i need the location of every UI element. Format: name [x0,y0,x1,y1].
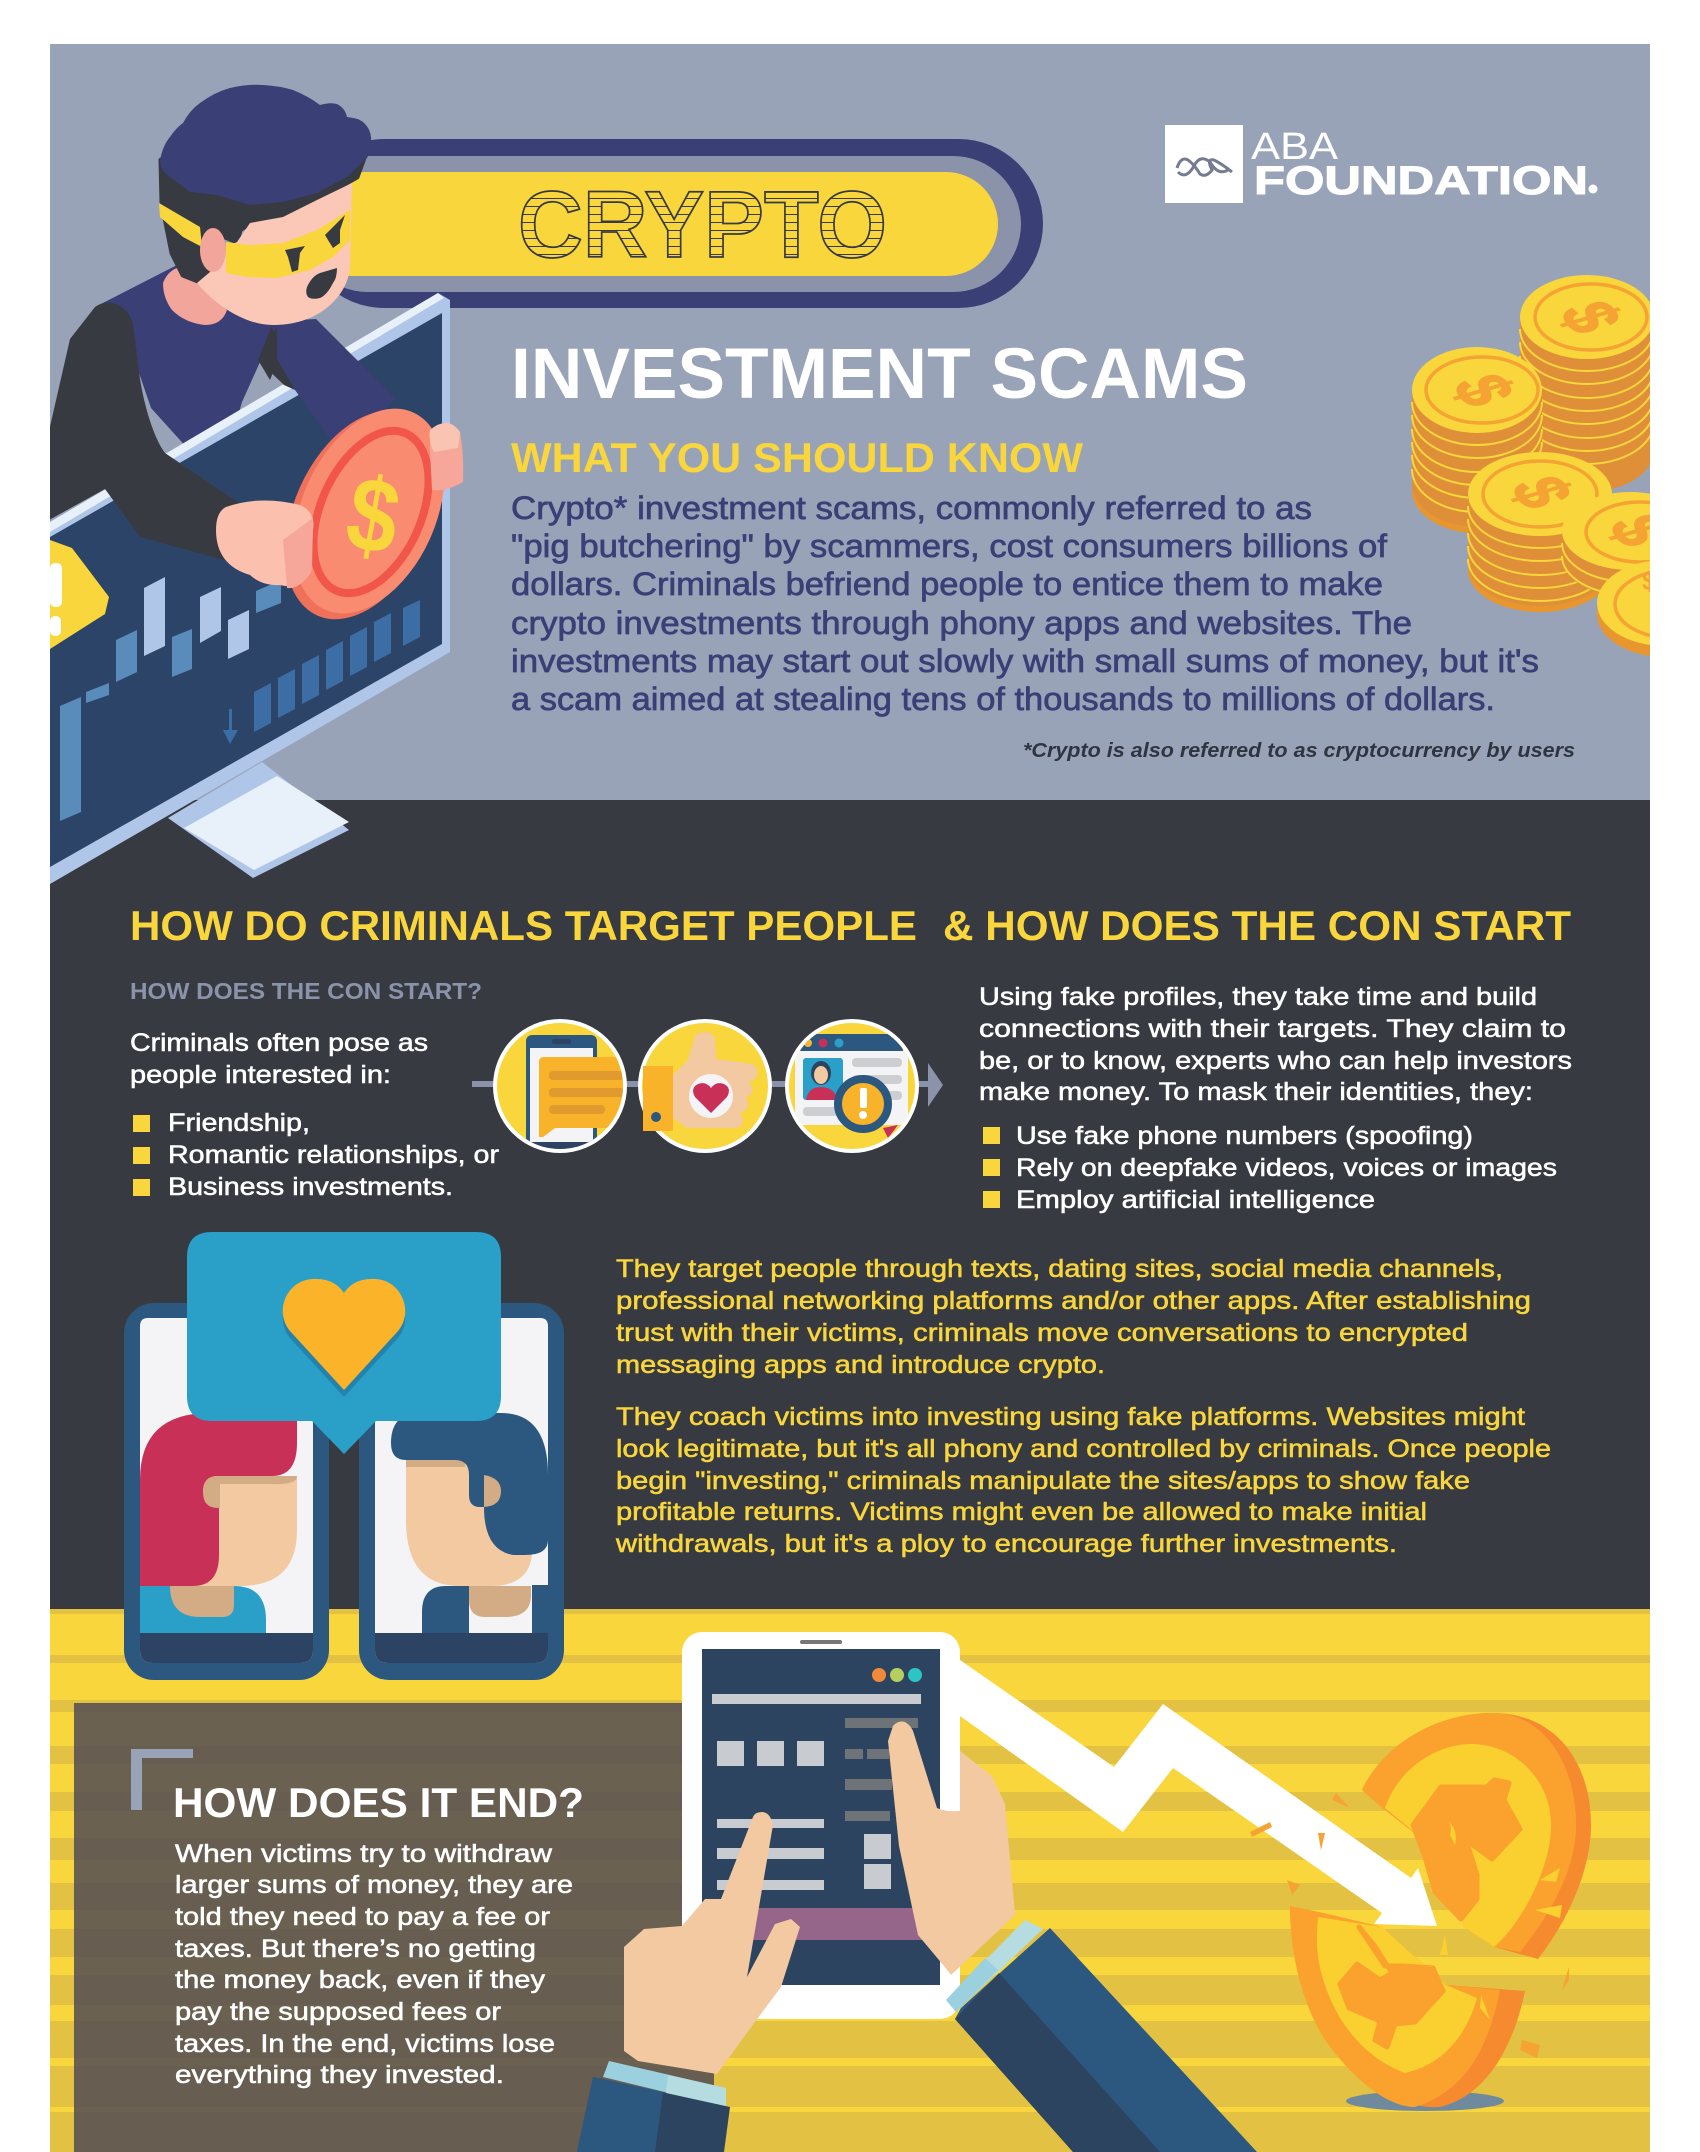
text block: intro: investments may start out slowly with small sums of money, but it's [511,643,1539,679]
text block: how it ends: larger sums of money, they are [175,1871,573,1899]
illustration: coin held by thief [292,408,444,620]
text block: how they target: trust with their victims, criminals move conversations to encrypted [616,1319,1468,1347]
text block: how it ends: pay the supposed fees or [175,1998,501,2026]
bullet list: masking tactics: Use fake phone numbers (spoofing) [1016,1122,1473,1150]
illustration: coin stacks [1411,275,1650,656]
illustration: tablet [682,1632,960,2019]
text block: how they target: They target people through texts, dating sites, social media channels, [616,1255,1503,1283]
text block: how it ends: everything they invested. [175,2061,504,2089]
illustration: coin stacks: $ [1493,468,1591,516]
heading: how do criminals target people: & HOW DOES THE CON START [943,902,1571,949]
text block: how it ends: taxes. But there’s no getting [175,1935,536,1963]
heading: how do criminals target people [132,911,1571,940]
illustration: thief torso [95,264,281,450]
heading: what you should know: WHAT YOU SHOULD KNOW [511,434,1083,481]
text block: fake profiles: Using fake profiles, they take time and build [979,983,1537,1011]
text block: fake platforms: profitable returns. Victims might even be allowed to make initial [616,1498,1427,1526]
illustration: coin stacks: $ [1642,566,1657,596]
title pill [300,139,1043,308]
text block: fake profiles [979,983,1572,1106]
text block: intro: crypto investments through phony apps and websites. The [511,605,1412,641]
title: CRYPTO: CRYPTO [518,172,887,278]
illustration: coin stacks: $ [1435,366,1533,414]
panel: how does it end background [74,1703,714,2152]
bullet list: interests: Romantic relationships, or [168,1141,499,1169]
illustration: coin held by thief: $ [338,453,408,578]
illustration: thief hands [216,423,463,588]
text block: fake platforms: begin "investing," criminals manipulate the sites/apps to show fake [616,1467,1470,1495]
illustration: thief head [159,85,371,325]
heading: how does it end: HOW DOES IT END? [173,1779,584,1826]
heading: how do criminals target people: HOW DO CRIMINALS TARGET PEOPLE [130,902,917,949]
text block: fake platforms: look legitimate, but it's all phony and controlled by criminals. Once people [616,1435,1551,1463]
text block: fake platforms [615,1403,1551,1558]
text block: fake profiles: make money. To mask their identities, they: [979,1078,1533,1106]
logo: ABA Foundation [1165,125,1598,203]
heading: investment scams: INVESTMENT SCAMS [511,335,1248,414]
decorative heading bracket [131,1749,193,1810]
text block: criminals pose: people interested in: [130,1061,391,1089]
bullet list: masking tactics: Rely on deepfake videos, voices or images [1016,1154,1557,1182]
illustration: speech bubble with heart [187,1232,501,1454]
text block: how they target: messaging apps and introduce crypto. [616,1351,1105,1379]
bullet list: interests [133,1109,499,1201]
logo: ABA Foundation: FOUNDATION [1254,159,1588,203]
bullet list: interests: Friendship, [168,1109,310,1137]
text block: criminals pose: Criminals often pose as [130,1029,428,1057]
text block: how it ends: When victims try to withdraw [175,1840,553,1868]
bullet list: masking tactics [983,1122,1557,1214]
bullet list: masking tactics: Employ artificial intelligence [1016,1186,1375,1214]
panel: dark middle section [50,800,1650,1609]
text block: intro: dollars. Criminals befriend people to entice them to make [511,566,1383,602]
bullet list: interests: Business investments. [168,1173,453,1201]
illustration: thief arms [49,303,396,560]
text block: intro: a scam aimed at stealing tens of thousands to millions of dollars. [511,681,1495,717]
illustration: right hand holding tablet [888,1722,1257,2152]
icon: browser profile with warning magnifier [785,1019,919,1153]
footnote: *Crypto is also referred to as cryptocurrency by users [1023,740,1575,762]
icon: thumbs up with heart [638,1019,772,1153]
illustration: broken coin [1250,1713,1591,2111]
text block: how they target: professional networking platforms and/or other apps. After establishing [616,1287,1531,1315]
illustration: coin stacks: $ [1542,293,1640,341]
text block: fake profiles: connections with their targets. They claim to [979,1015,1566,1043]
logo: ABA Foundation: ABA [1251,126,1339,168]
text block: intro: Crypto* investment scams, commonly referred to as [511,490,1312,526]
illustration: coin stacks: $ [1591,506,1689,554]
arrow: icon connector [472,1063,943,1107]
text block: how it ends: taxes. In the end, victims lose [175,2030,555,2058]
text block: fake platforms: They coach victims into investing using fake platforms. Websites might [616,1403,1525,1431]
text block: how it ends: told they need to pay a fee or [175,1903,550,1931]
text block: how it ends: the money back, even if they [175,1966,546,1994]
icon: phone with chat bubble [493,1019,630,1160]
text block: criminals pose [130,1029,428,1089]
text block: how it ends [175,1840,573,2089]
illustration: right phone with man [359,1303,564,1680]
text block: intro [511,490,1539,717]
illustration: monitor [50,293,450,884]
illustration: left phone with woman [124,1303,329,1680]
text block: intro: "pig butchering" by scammers, cost consumers billions of [511,528,1387,564]
panel: header background [50,44,1650,800]
text block: fake profiles: be, or to know, experts who can help investors [979,1047,1572,1075]
illustration: left hand pointing [577,1812,800,2152]
text block: fake platforms: withdrawals, but it's a ploy to encourage further investments. [615,1530,1397,1558]
panel: yellow striped bottom section [50,1609,1650,2152]
text block: how they target [616,1255,1531,1379]
illustration: falling white arrow [960,1660,1437,1926]
subheading: how does the con start: HOW DOES THE CON START? [130,978,482,1004]
